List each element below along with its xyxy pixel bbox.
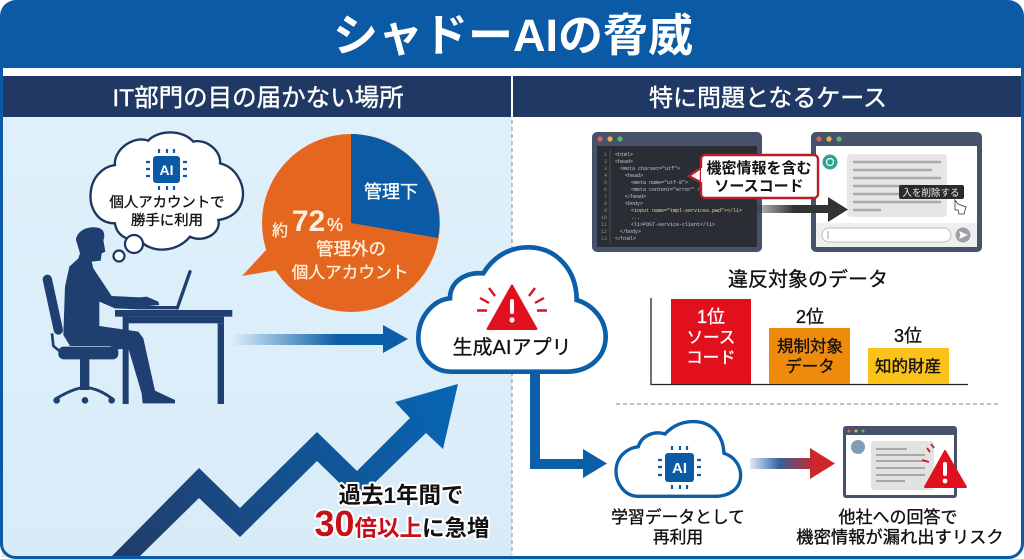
icon: warning triangle bbox=[925, 451, 966, 487]
caption: leak risk: 機密情報が漏れ出すリスク bbox=[796, 527, 1004, 547]
code editor window: </body> bbox=[620, 229, 641, 235]
code editor window: ... bbox=[631, 215, 640, 221]
code editor window: 4 bbox=[604, 173, 607, 179]
code editor window: 6 bbox=[604, 187, 607, 193]
code editor window: <li>POST-service-client</li> bbox=[631, 222, 715, 228]
title band bbox=[0, 0, 1024, 68]
pie chart callout: 約 bbox=[272, 222, 288, 240]
pie chart callout: 管理外の bbox=[316, 239, 386, 259]
callout: source code with secrets: ソースコード bbox=[714, 178, 804, 195]
code editor window: 9 bbox=[604, 208, 607, 214]
arrow: reuse to leak bbox=[750, 448, 835, 479]
leak response window bbox=[843, 426, 966, 498]
bar: rank 2 bbox=[769, 307, 850, 384]
growth caption: 30倍以上に急増 bbox=[314, 503, 490, 544]
growth arrow bbox=[112, 384, 458, 556]
bar: rank 2: 2位 bbox=[796, 307, 824, 327]
pie chart callout: 72 bbox=[292, 205, 325, 238]
panel: left background bbox=[2, 117, 512, 557]
cloud: generative AI app: 生成AIアプリ bbox=[453, 336, 571, 359]
code editor window: 2 bbox=[604, 159, 607, 165]
code editor window: <meta charset="utf"> bbox=[620, 166, 680, 172]
code editor window: </head> bbox=[625, 194, 646, 200]
caption: leak risk bbox=[796, 507, 1004, 547]
arrow: person to cloud bbox=[232, 325, 408, 353]
caption: leak risk: 他社への回答で bbox=[838, 507, 958, 527]
growth caption bbox=[314, 483, 490, 544]
heading: left panel: IT部門の目の届かない場所 bbox=[112, 84, 404, 112]
bar chart: violating data bbox=[651, 298, 968, 384]
icon: AI chip bbox=[146, 149, 187, 190]
caption: training reuse: 学習データとして bbox=[611, 507, 745, 527]
code editor window: <meta name="utf-8"> bbox=[631, 180, 688, 186]
code editor window: 5 bbox=[604, 180, 607, 186]
code editor window: 3 bbox=[604, 166, 607, 172]
icon: person at desk silhouette bbox=[47, 227, 232, 404]
code editor window: <input name="tmpl-services.pwd"></li> bbox=[631, 208, 742, 214]
bar: rank 3: 知的財産 bbox=[875, 357, 941, 376]
callout: source code with secrets: 機密情報を含む bbox=[706, 159, 812, 177]
chart title: 違反対象のデータ bbox=[728, 268, 888, 291]
pie chart callout: 個人アカウント bbox=[292, 263, 408, 282]
arrow: code to chat bbox=[740, 197, 848, 222]
chat window bbox=[811, 132, 982, 252]
thought bubble bbox=[91, 132, 243, 262]
code editor window: <meta content="error" /> bbox=[631, 187, 703, 193]
tooltip button: 入を削除する bbox=[902, 187, 960, 199]
cloud: generative AI app bbox=[418, 247, 606, 372]
thought bubble: 個人アカウントで bbox=[109, 194, 225, 211]
cloud: training reuse bbox=[616, 422, 741, 496]
caption: training reuse bbox=[611, 507, 745, 547]
icon: AI chip: AI bbox=[160, 162, 174, 178]
code editor window: 7 bbox=[604, 194, 607, 200]
code editor window: <body> bbox=[625, 201, 643, 207]
bar: rank 2: 規制対象 bbox=[777, 337, 843, 356]
code editor window: <head> bbox=[615, 159, 633, 165]
heading: right panel: 特に問題となるケース bbox=[649, 85, 887, 112]
tooltip button bbox=[899, 185, 964, 199]
pie chart callout: 管理下 bbox=[364, 182, 418, 202]
thought bubble: 勝手に利用 bbox=[131, 212, 203, 229]
code editor window: </html> bbox=[615, 236, 636, 242]
bar: rank 2: データ bbox=[785, 356, 835, 376]
code editor window: 13 bbox=[601, 236, 607, 242]
bar: rank 1: コード bbox=[686, 349, 736, 367]
pie chart callout: % bbox=[327, 215, 343, 235]
code editor window bbox=[592, 132, 762, 252]
bar: rank 3: 3位 bbox=[894, 326, 922, 346]
heading: right panel bbox=[513, 76, 1022, 117]
code editor window: 12 bbox=[601, 229, 607, 235]
bar: rank 1 bbox=[671, 299, 751, 384]
icon: warning triangle bbox=[477, 286, 547, 329]
callout: source code with secrets bbox=[689, 155, 818, 198]
arrow: cloud to training data bbox=[530, 370, 607, 478]
bar: rank 1: 1位 bbox=[697, 307, 725, 327]
code editor window: 8 bbox=[604, 201, 607, 207]
code editor window: <head> bbox=[625, 173, 643, 179]
pie chart callout bbox=[242, 134, 440, 312]
caption: training reuse: 再利用 bbox=[653, 528, 703, 547]
code editor window: 10 bbox=[601, 215, 607, 221]
heading: left panel bbox=[2, 76, 511, 117]
icon: AI chip: AI bbox=[672, 460, 687, 477]
growth caption: 過去1年間で bbox=[338, 483, 464, 508]
panel: right background bbox=[512, 117, 1022, 557]
code editor window: 11 bbox=[601, 222, 607, 228]
code editor window: 1 bbox=[604, 152, 607, 158]
title band: シャドーAIの脅威 bbox=[333, 10, 693, 61]
bar: rank 3 bbox=[868, 326, 949, 384]
bar: rank 1: ソース bbox=[687, 329, 735, 347]
code editor window: <html> bbox=[615, 152, 633, 158]
